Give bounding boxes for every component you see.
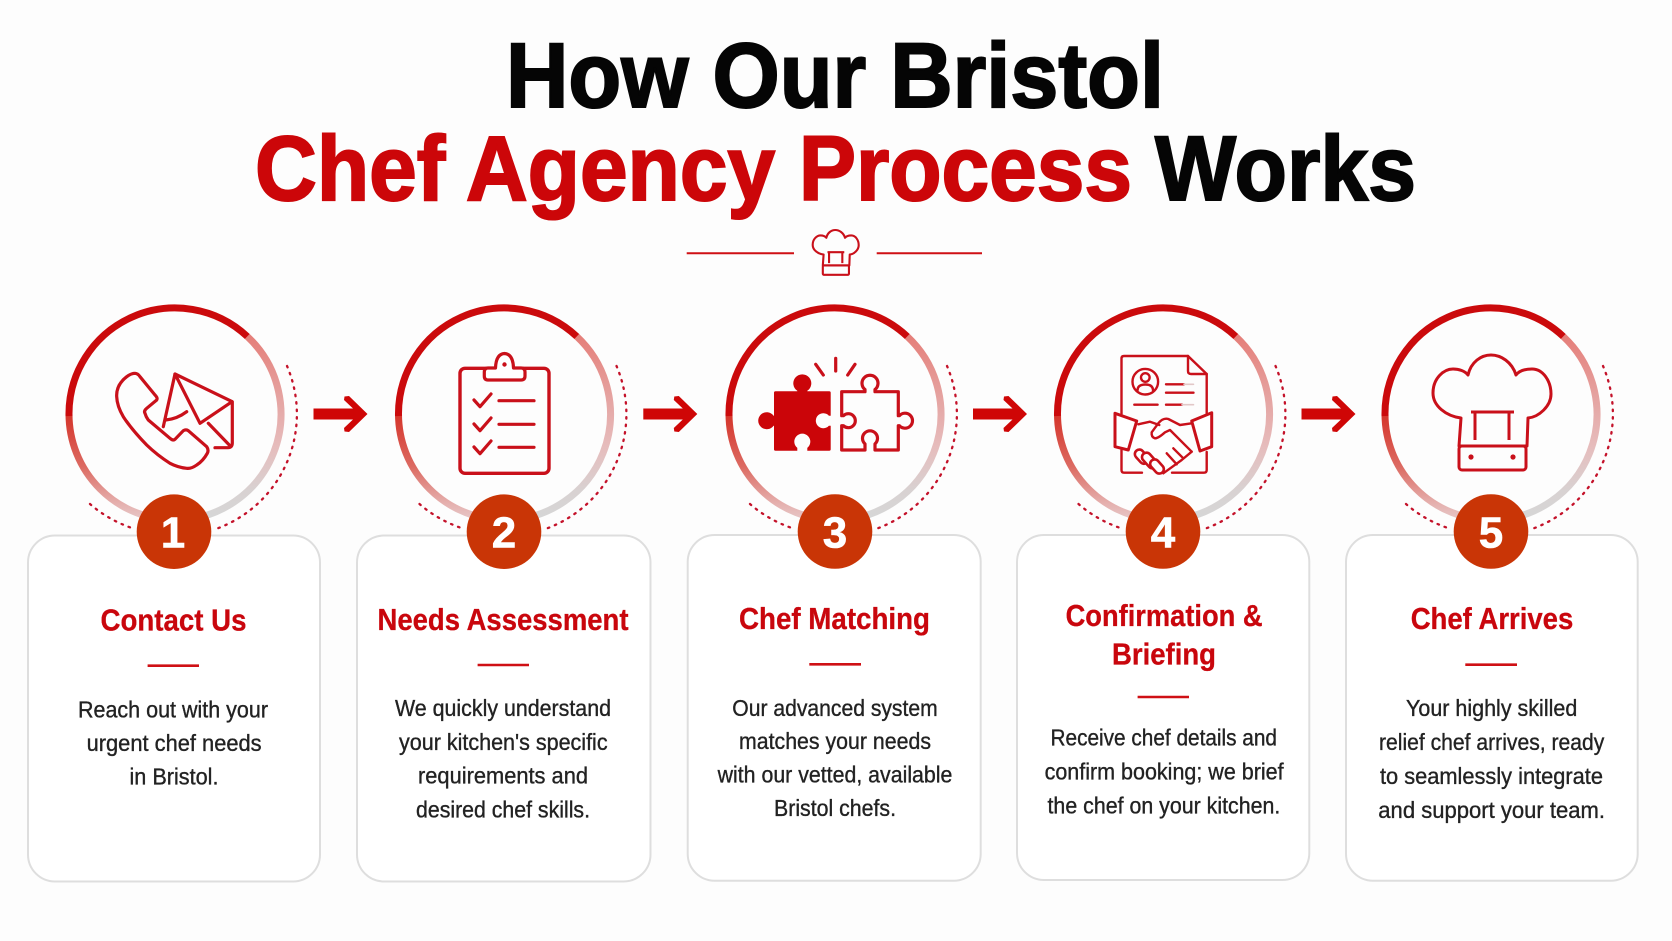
badge 4 bbox=[1126, 494, 1200, 569]
body: confirmation and briefing: the chef on your kitchen. bbox=[1048, 792, 1280, 818]
body: contact us: Reach out with your bbox=[78, 697, 268, 723]
ring 1 bbox=[69, 308, 297, 530]
ring 5 bbox=[1385, 308, 1613, 530]
heading: chef arrives: Chef Arrives bbox=[1411, 601, 1573, 636]
ring 3 bbox=[729, 308, 957, 530]
step 2: needs assessment bbox=[357, 308, 650, 882]
arrow 1 to 2 bbox=[314, 396, 368, 432]
card 3 bbox=[688, 535, 981, 881]
step 1: contact us bbox=[28, 308, 320, 882]
body: confirmation and briefing: confirm booking; we brief bbox=[1045, 758, 1284, 784]
title divider with chef hat icon bbox=[687, 230, 982, 275]
heading: confirmation and briefing bbox=[1066, 598, 1263, 672]
body: chef matching: with our vetted, available bbox=[717, 761, 952, 787]
badge 5 bbox=[1454, 494, 1528, 569]
arrow 3 to 4 bbox=[973, 396, 1027, 432]
body: chef arrives: and support your team. bbox=[1378, 797, 1605, 823]
badge 1 bbox=[137, 494, 211, 569]
icon: phone and envelope bbox=[117, 373, 232, 468]
icon: chef hat bbox=[1433, 355, 1551, 470]
badge 3: 3 bbox=[823, 508, 847, 558]
body: contact us bbox=[78, 697, 268, 790]
step 4: confirmation and briefing bbox=[1017, 308, 1309, 880]
badge 3 bbox=[798, 494, 872, 569]
badge 2 bbox=[467, 494, 541, 569]
heading: contact us: Contact Us bbox=[100, 602, 246, 638]
card 1 bbox=[28, 536, 320, 882]
icon: puzzle pieces bbox=[758, 358, 912, 451]
heading: chef matching: Chef Matching bbox=[739, 601, 930, 636]
body: confirmation and briefing bbox=[1045, 725, 1284, 818]
badge 4: 4 bbox=[1151, 508, 1176, 558]
body: needs assessment: desired chef skills. bbox=[416, 796, 590, 822]
card 2 bbox=[357, 536, 650, 882]
step 5: chef arrives bbox=[1346, 308, 1638, 881]
icon: contract and handshake bbox=[1115, 356, 1212, 475]
icon: clipboard checklist bbox=[460, 354, 549, 473]
body: chef arrives: to seamlessly integrate bbox=[1380, 763, 1603, 789]
ring 2 bbox=[398, 308, 626, 530]
heading: confirmation and briefing: Briefing bbox=[1112, 636, 1216, 672]
badge 5: 5 bbox=[1479, 508, 1503, 558]
body: needs assessment bbox=[395, 695, 611, 822]
ring 4 bbox=[1057, 308, 1285, 530]
body: chef arrives: relief chef arrives, ready bbox=[1379, 729, 1605, 755]
card 4 bbox=[1017, 535, 1309, 880]
arrow 2 to 3 bbox=[643, 396, 697, 432]
body: contact us: in Bristol. bbox=[130, 764, 218, 790]
heading: needs assessment: Needs Assessment bbox=[378, 602, 628, 637]
card 5 bbox=[1346, 535, 1638, 881]
title: Works bbox=[1155, 118, 1416, 220]
title: How Our Bristol bbox=[506, 25, 1164, 127]
body: contact us: urgent chef needs bbox=[87, 730, 262, 756]
body: chef matching: Bristol chefs. bbox=[774, 795, 896, 821]
heading: confirmation and briefing: Confirmation & bbox=[1066, 598, 1263, 633]
body: needs assessment: your kitchen's specific bbox=[399, 729, 608, 755]
body: confirmation and briefing: Receive chef details and bbox=[1050, 725, 1277, 751]
body: needs assessment: We quickly understand bbox=[395, 695, 611, 721]
body: chef arrives bbox=[1378, 695, 1605, 823]
body: needs assessment: requirements and bbox=[418, 763, 588, 789]
badge 1: 1 bbox=[161, 508, 185, 558]
body: chef arrives: Your highly skilled bbox=[1406, 695, 1577, 721]
step 3: chef matching bbox=[688, 308, 981, 881]
title: Chef Agency Process bbox=[255, 118, 1132, 220]
body: chef matching bbox=[717, 695, 952, 821]
body: chef matching: Our advanced system bbox=[732, 695, 938, 721]
arrow 4 to 5 bbox=[1302, 396, 1356, 432]
badge 2: 2 bbox=[492, 508, 516, 558]
body: chef matching: matches your needs bbox=[739, 728, 931, 754]
title bbox=[255, 25, 1416, 220]
